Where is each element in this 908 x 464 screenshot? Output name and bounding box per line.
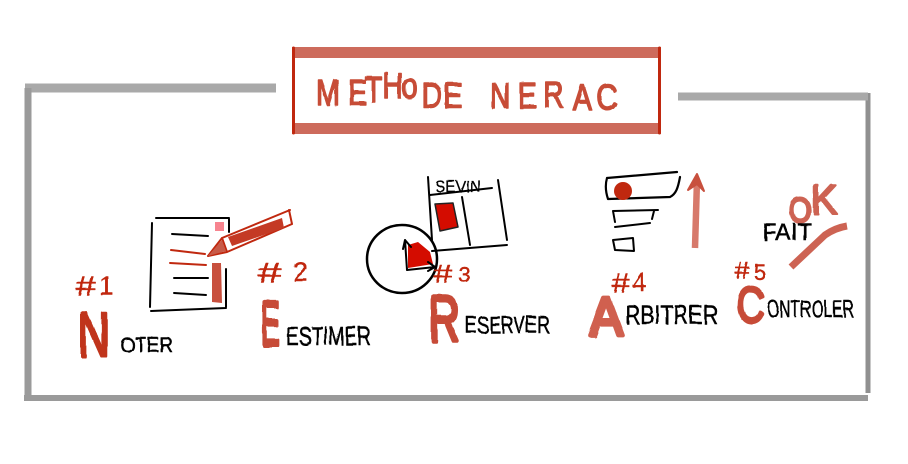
number 3: 3	[458, 262, 470, 287]
number 1: #	[76, 271, 97, 301]
step 4: arbitrer	[590, 172, 718, 346]
label estimer: ESTIMER	[286, 321, 371, 351]
label eserver: ESERVER	[465, 312, 550, 339]
label rbitrer: RBITRER	[625, 300, 718, 330]
step 3: reserver	[367, 177, 550, 355]
label oter: OTER	[120, 334, 173, 357]
icon: done checkmark	[762, 176, 847, 267]
title box	[292, 47, 661, 134]
number 2: #	[258, 257, 282, 288]
step 2: estimer	[258, 257, 371, 359]
table title: SEVIN	[435, 177, 481, 196]
big letter E: E	[261, 290, 280, 359]
ok mark: K	[811, 176, 838, 223]
number 4	[612, 267, 646, 298]
number 3: #	[434, 261, 454, 288]
icon: table and pie chart	[367, 177, 507, 293]
big letter R: R	[429, 284, 459, 355]
number 5	[735, 259, 766, 285]
step 5: controler	[735, 176, 854, 333]
title text: METHoDE NERAC	[316, 65, 618, 118]
icon: priority bars and up arrow	[606, 172, 704, 251]
number 1: 1	[99, 271, 114, 301]
ok mark: O	[789, 191, 811, 230]
number 2: 2	[293, 257, 308, 287]
fait label: FAIT	[762, 219, 812, 246]
number 1	[76, 271, 114, 301]
number 2	[258, 257, 308, 288]
big letter N: N	[78, 301, 110, 370]
big letter C: C	[737, 278, 764, 333]
label ontroler: ONTROLER	[767, 296, 854, 323]
number 4: #	[612, 269, 631, 298]
ok mark	[789, 176, 838, 230]
number 3	[434, 261, 470, 288]
step 1: noter	[76, 210, 292, 370]
number 4: 4	[632, 267, 646, 297]
big letter A: A	[590, 287, 624, 346]
panel: grey hand-drawn frame	[24, 88, 868, 401]
number 5: 5	[754, 260, 766, 285]
icon: notepad with pencil	[150, 210, 292, 311]
number 5: #	[735, 259, 750, 283]
